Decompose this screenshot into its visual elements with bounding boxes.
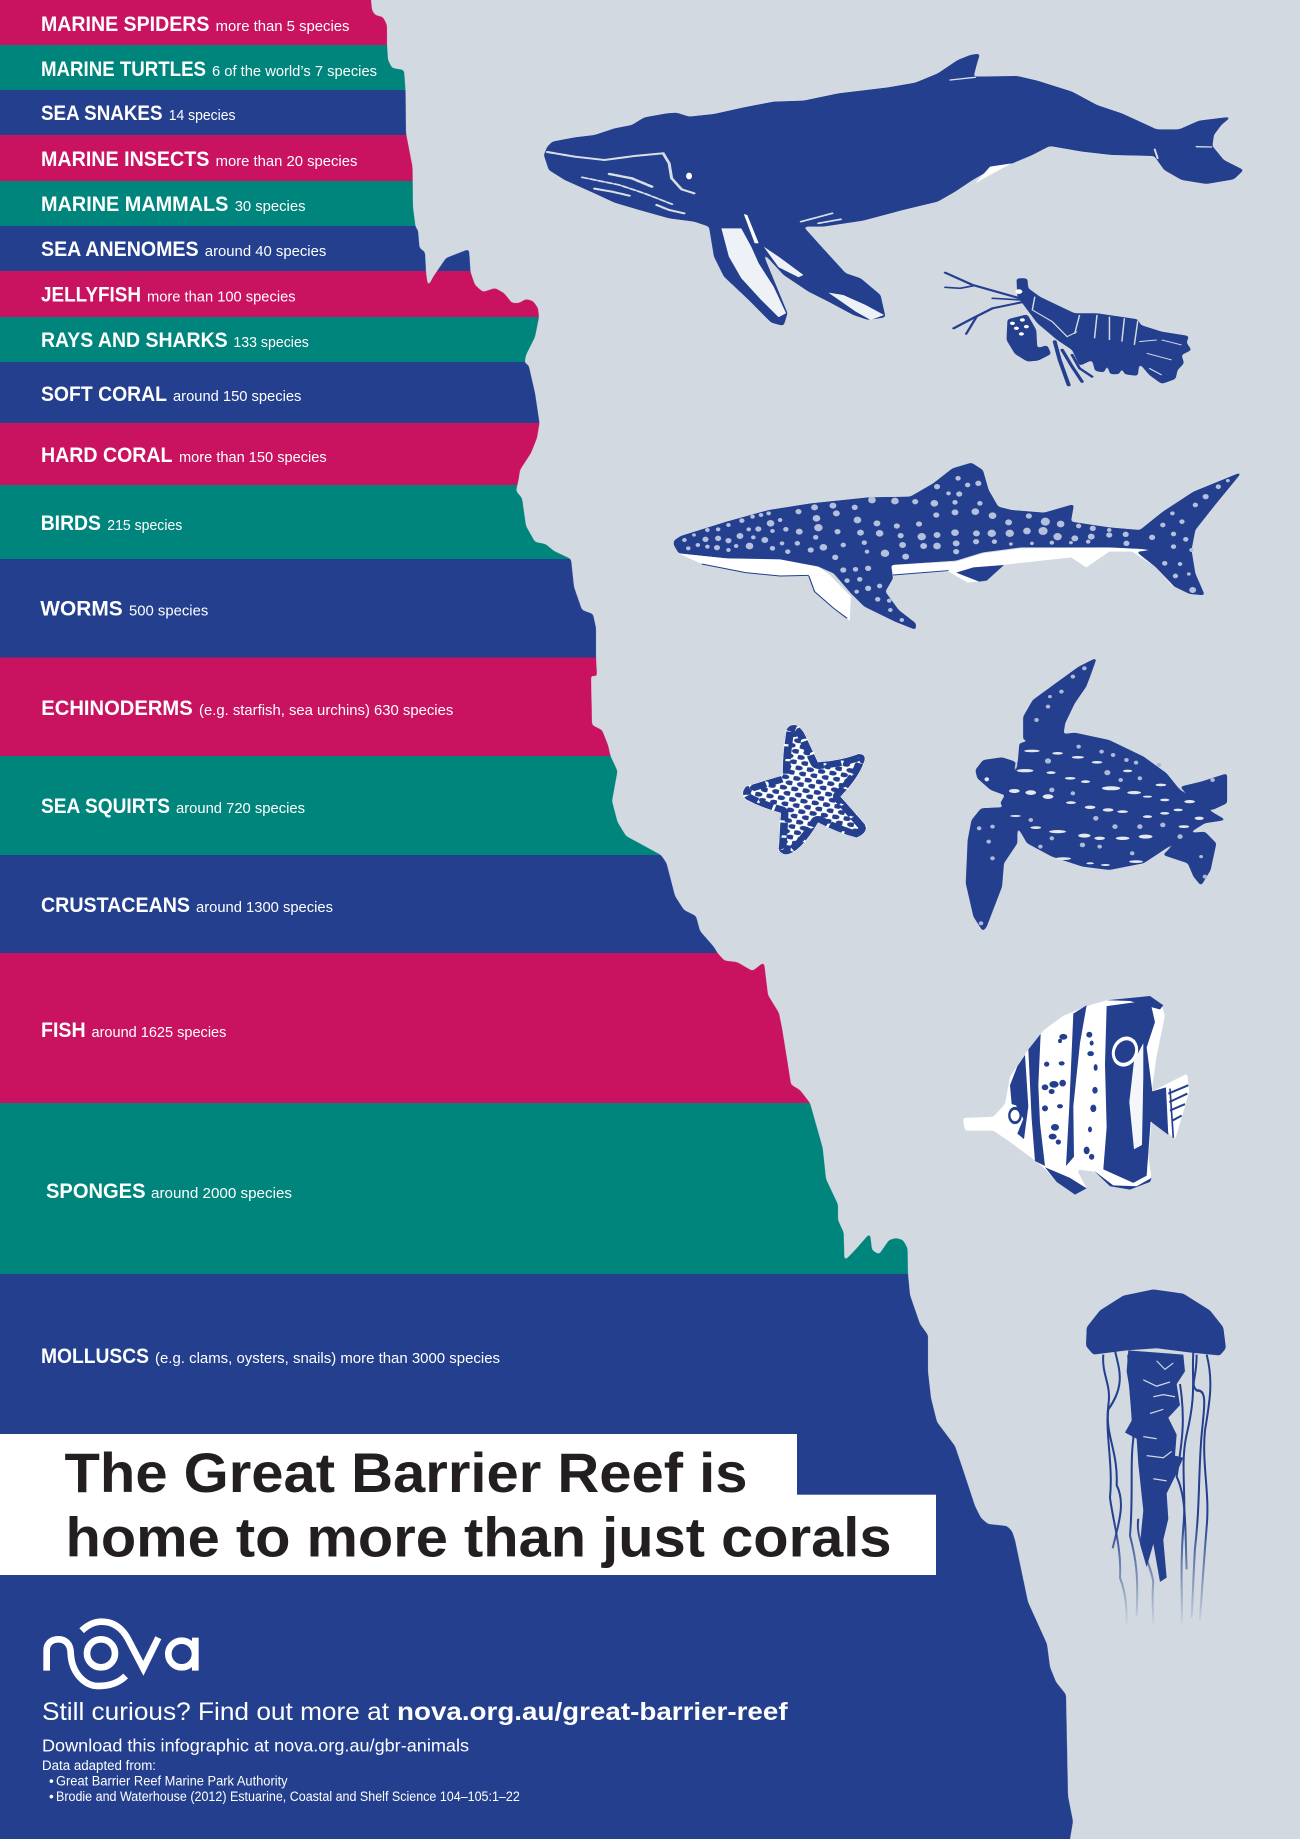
label: marine turtles: MARINE TURTLES [41,58,206,81]
label: sea squirts: around 720 species [176,800,305,817]
band: birds [0,485,570,559]
label: sea anenomes: around 40 species [205,243,326,260]
label: fish: around 1625 species [92,1024,226,1041]
band: crustaceans [0,855,718,953]
label: marine turtles: 6 of the world’s 7 species [212,63,377,80]
label: sea squirts: SEA SQUIRTS [41,795,170,818]
band: sea anenomes [0,226,471,271]
label: marine mammals: 30 species [235,198,306,215]
data sources: • [49,1774,54,1789]
band: marine mammals [0,181,416,226]
label: marine spiders [41,13,350,36]
label: birds: 215 species [107,517,182,534]
icon: humpback whale [544,53,1244,326]
label: sponges [46,1180,292,1203]
label: soft coral: around 150 species [173,388,301,405]
icon: butterflyfish [963,996,1189,1195]
label: fish: FISH [41,1019,86,1042]
label: molluscs: MOLLUSCS [41,1345,149,1368]
icon: whale shark [674,463,1242,630]
label: crustaceans: around 1300 species [196,899,333,916]
data sources [42,1758,520,1804]
label: fish [41,1019,226,1042]
data sources: Great Barrier Reef Marine Park Authority [56,1774,288,1789]
band: echinoderms [0,658,611,756]
icon: mantis shrimp [945,273,1192,385]
label: worms: 500 species [129,603,208,620]
label: sea snakes: 14 species [169,107,236,124]
icon: starfish [742,724,867,855]
label: crustaceans: CRUSTACEANS [41,894,190,917]
band: molluscs [0,1274,1100,1839]
band: marine turtles [0,45,406,90]
label: sea snakes [41,102,236,125]
band: sea snakes [0,90,406,135]
data sources: Brodie and Waterhouse (2012) Estuarine, Coastal and Shelf Science 104–105:1–22 [56,1789,520,1804]
label: sea squirts [41,795,305,818]
data sources: • [49,1789,54,1804]
band: sponges [0,1103,908,1274]
label: marine spiders: more than 5 species [216,18,350,35]
icon: leatherback turtle [966,657,1227,932]
label: marine insects [41,148,357,171]
data sources: Data adapted from: [42,1758,156,1773]
band: hard coral [0,423,540,485]
band: marine insects [0,135,413,181]
download line: Download this infographic at nova.org.au/gbr-animals [42,1736,469,1756]
label: marine turtles [41,58,377,81]
label: birds [41,512,182,535]
icon: jellyfish [1086,1289,1226,1624]
call to action [42,1698,788,1726]
label: worms [40,598,208,621]
label: jellyfish: JELLYFISH [41,284,141,307]
label: jellyfish: more than 100 species [147,289,296,306]
band: marine spiders [0,0,388,45]
band: jellyfish [0,271,539,317]
label: hard coral: more than 150 species [179,449,327,466]
label: marine insects: MARINE INSECTS [41,148,209,171]
title banner: home to more than just corals [66,1506,892,1569]
label: crustaceans [41,894,333,917]
title banner [0,1434,936,1575]
label: soft coral: SOFT CORAL [41,383,167,406]
label: sea snakes: SEA SNAKES [41,102,162,125]
band: worms [0,559,596,658]
label: hard coral [41,444,327,467]
label: sea anenomes: SEA ANENOMES [41,238,199,261]
label: worms: WORMS [40,598,123,621]
band: sea squirts [0,756,660,855]
label: sea anenomes [41,238,326,261]
label: rays and sharks: RAYS AND SHARKS [41,329,228,352]
call to action: nova.org.au/great-barrier-reef [397,1698,788,1726]
band: soft coral [0,362,540,423]
label: jellyfish [41,284,296,307]
label: rays and sharks: 133 species [233,334,309,351]
band: rays and sharks [0,317,539,362]
label: marine insects: more than 20 species [216,153,357,170]
label: sponges: around 2000 species [151,1185,292,1202]
label: echinoderms [41,697,453,720]
band: fish [0,953,810,1103]
label: sponges: SPONGES [46,1180,146,1203]
call to action: Still curious? Find out more at [42,1698,389,1726]
label: molluscs [41,1345,500,1368]
label: soft coral [41,383,301,406]
label: molluscs: (e.g. clams, oysters, snails) more than 3000 species [155,1350,500,1367]
title banner: The Great Barrier Reef is [64,1441,748,1504]
label: echinoderms: ECHINODERMS [41,697,193,720]
label: hard coral: HARD CORAL [41,444,173,467]
label: echinoderms: (e.g. starfish, sea urchins) 630 species [199,702,453,719]
logo: nova [47,1622,195,1686]
label: birds: BIRDS [41,512,101,535]
label: marine mammals: MARINE MAMMALS [41,193,228,216]
label: marine spiders: MARINE SPIDERS [41,13,209,36]
